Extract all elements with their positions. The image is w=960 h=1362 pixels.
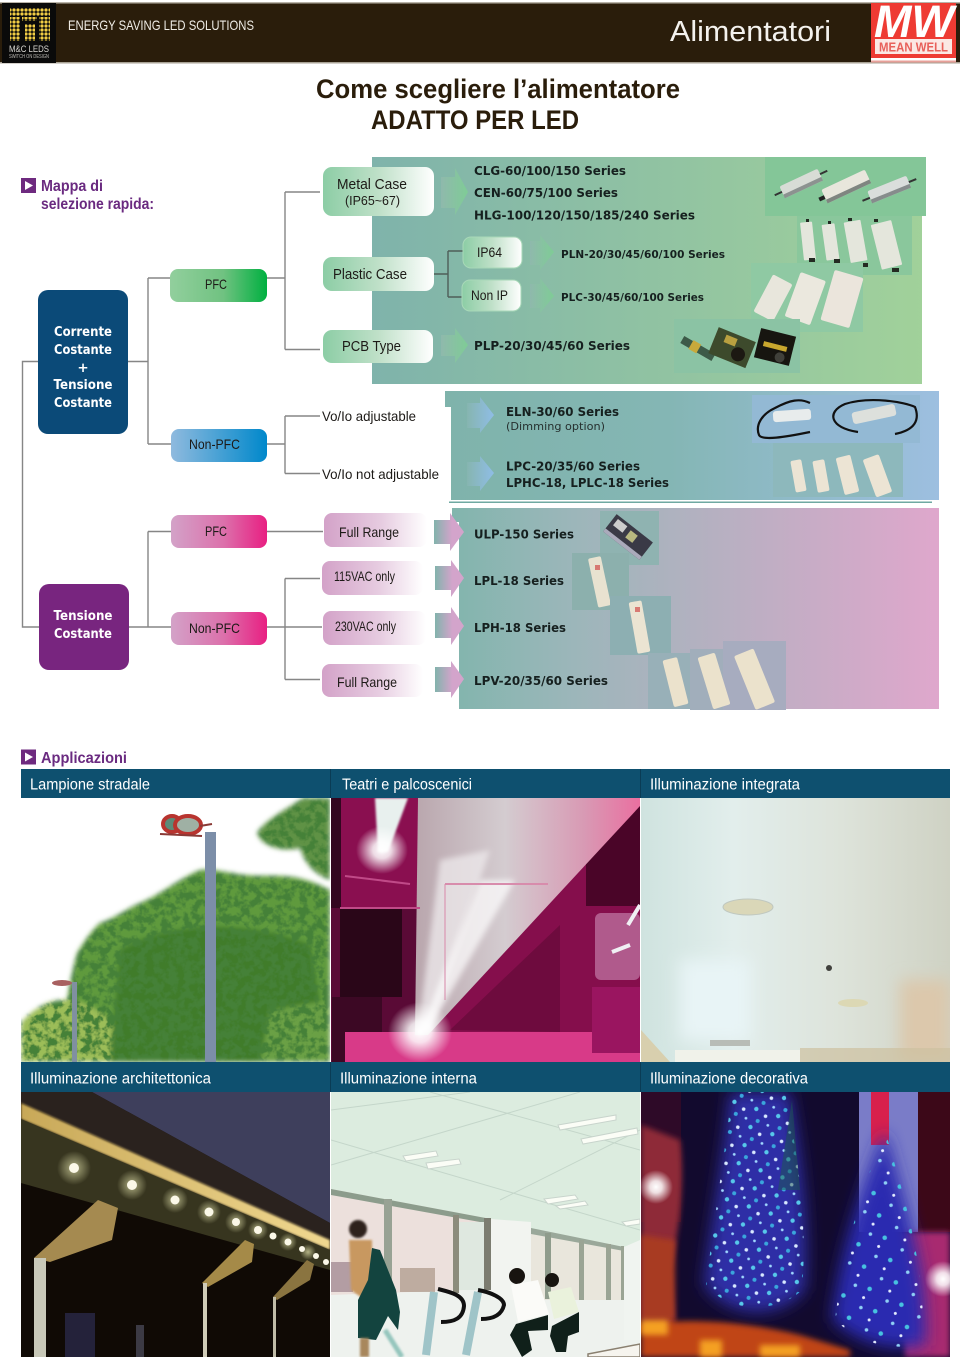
ceiling lights: [403, 1115, 640, 1226]
box: Corrente Costante + Tensione Costante: Costante: [54, 395, 112, 411]
box: 115VAC only: [322, 561, 423, 595]
box: Corrente Costante + Tensione Costante: +: [77, 360, 89, 376]
button: PFC pink: [171, 515, 267, 548]
product photo: ULP: [600, 511, 659, 565]
box: Tensione Costante: Tensione: [54, 608, 112, 624]
series: LPL: LPL-18 Series: [474, 574, 564, 588]
series: ULP: ULP-150 Series: [474, 528, 574, 542]
treadmill: [426, 1289, 504, 1355]
arrow: Vo/Io adjustable: [467, 397, 494, 433]
tagline: ENERGY SAVING LED SOLUTIONS: [68, 17, 254, 33]
photo: decorative lights: [639, 1092, 960, 1357]
panel: green PFC results: [372, 157, 926, 384]
photo: street lamp: [21, 798, 330, 1062]
series: ELN: ELN-30/60 Series: [506, 405, 619, 419]
button: Non-PFC blue: [171, 429, 267, 462]
box: Full Range Non-PFC: Full Range: [337, 674, 397, 690]
floor edge: [588, 1344, 640, 1357]
orange base: [641, 1321, 850, 1357]
box: 230VAC only: [323, 611, 426, 645]
arrow: IP64: [530, 235, 554, 270]
photo: ceiling lights: [641, 798, 950, 1062]
arrow: 115VAC: [435, 560, 464, 597]
box: Tensione Costante: [39, 584, 129, 670]
title: ADATTO PER LED: [371, 105, 579, 135]
header row 2: application names: Illuminazione interna: [340, 1070, 477, 1088]
header row 2: application names: [21, 1062, 950, 1092]
header band: [0, 0, 960, 64]
panel: blue non-PFC results: [445, 391, 939, 500]
header row 1: application names: [21, 769, 950, 798]
heading: selection map: [21, 178, 154, 213]
series: metal case: HLG-100/120/150/185/240 Series: [474, 208, 695, 222]
arrow: 230VAC: [435, 607, 464, 645]
arrow: Non IP: [530, 278, 554, 313]
header row 2: application names: Illuminazione decorativa: [650, 1070, 808, 1088]
photo: gym interior: [331, 1092, 640, 1357]
heading: selection map: selezione rapida:: [41, 196, 154, 213]
box: Metal Case: (IP65~67): [345, 193, 400, 208]
header row 1: application names: Lampione stradale: [30, 776, 150, 794]
series: metal case: CEN-60/75/100 Series: [474, 186, 618, 200]
product photo: ELN dimming drivers: [752, 395, 920, 443]
product photo: LPL: [572, 553, 629, 610]
box: PCB Type: PCB Type: [342, 338, 401, 355]
product photo: non-IP plastic drivers: [751, 263, 864, 332]
product photo: LPC drivers: [773, 443, 903, 498]
light dots: [706, 1092, 804, 1307]
product photo: LPH: [610, 596, 671, 655]
cyclists: [509, 1268, 579, 1357]
header title: Alimentatori: [670, 16, 831, 48]
title: Come scegliere l’alimentatore: [316, 74, 680, 104]
arrow: Vo/Io not adjustable: [467, 456, 494, 491]
box: IP64: IP64: [477, 244, 502, 260]
series: PLP: PLP-20/30/45/60 Series: [474, 339, 630, 353]
box: Full Range PFC: [324, 513, 427, 547]
series: metal case: [474, 164, 695, 222]
box: Corrente Costante + Tensione Costante: [38, 290, 128, 434]
box: Plastic Case: [323, 257, 434, 291]
button: Non-PFC blue: Non-PFC: [189, 436, 240, 452]
header row 2: application names: Illuminazione architettonica: [30, 1070, 211, 1088]
series: LPC: LPC-20/35/60 Series: [506, 460, 640, 474]
product photo: metal case drivers: [765, 157, 926, 216]
box: Tensione Costante: Costante: [54, 626, 112, 642]
button: Non-PFC pink: Non-PFC: [189, 620, 240, 636]
box: IP64: [463, 237, 522, 268]
box: 230VAC only: 230VAC only: [335, 618, 396, 634]
right windows: [531, 1228, 624, 1300]
box: 115VAC only: 115VAC only: [334, 568, 395, 584]
heading: applications: Applicazioni: [41, 750, 127, 767]
product photo: PCB type drivers: [674, 319, 800, 373]
arrow: Full Range Non-PFC: [435, 661, 464, 698]
arrow: PCB: [441, 328, 468, 363]
photo: architecture: [21, 1092, 330, 1357]
button: Non-PFC pink: [171, 612, 267, 645]
heading: selection map: Mappa di: [41, 178, 103, 195]
product photo: IP64 plastic drivers: [797, 216, 912, 275]
series: PLN: PLN-20/30/45/60/100 Series: [561, 249, 725, 261]
series: PLC: PLC-30/45/60/100 Series: [561, 292, 704, 304]
wall lights: [57, 1151, 329, 1265]
box: Non IP: Non IP: [471, 287, 508, 303]
series: LPC: [506, 460, 669, 490]
box: Corrente Costante + Tensione Costante: Corrente: [54, 324, 112, 340]
button: PFC pink: PFC: [205, 523, 227, 539]
series: metal case: CLG-60/100/150 Series: [474, 164, 626, 178]
box: Full Range PFC: Full Range: [339, 524, 399, 540]
runner: [349, 1220, 402, 1357]
button: PFC green: [170, 269, 267, 302]
arrow: Full Range PFC: [434, 513, 464, 551]
box: Plastic Case: Plastic Case: [333, 266, 407, 283]
logo: Mean Well: MEAN WELL: [879, 40, 948, 54]
left windows: [331, 1189, 491, 1295]
connector lines: tree: [22, 192, 463, 680]
box: PCB Type: [323, 330, 433, 363]
photo: stage: [331, 798, 640, 1062]
button: PFC green: PFC: [205, 276, 227, 292]
panel: pink constant voltage results: [452, 508, 939, 710]
series: ELN: (Dimming option): [506, 421, 605, 433]
arrow: metal case: [441, 168, 468, 215]
box: Metal Case: [323, 167, 434, 216]
label: Vo/Io not adjustable: Vo/Io not adjustable: [322, 466, 439, 482]
logo: M&C LEDS: [2, 3, 56, 63]
box: Corrente Costante + Tensione Costante: Tensione: [54, 377, 112, 393]
columns: [34, 1200, 314, 1357]
series: LPC: LPHC-18, LPLC-18 Series: [506, 476, 669, 490]
logo: M&C LEDS: M&C LEDS: [9, 44, 49, 55]
logo: Mean Well: [871, 0, 958, 62]
product photo: LPV: [648, 641, 786, 710]
lamp pole: [52, 816, 216, 1062]
header row 1: application names: Teatri e palcoscenici: [342, 776, 472, 794]
series: ELN: [506, 405, 619, 433]
tree glow: [704, 1092, 806, 1312]
box: Corrente Costante + Tensione Costante: Costante: [54, 342, 112, 358]
box: Non IP: [462, 280, 521, 311]
logo: M&C LEDS: SWITCH ON DESIGN: [9, 54, 49, 60]
series: LPV: LPV-20/35/60 Series: [474, 674, 608, 688]
series: LPH: LPH-18 Series: [474, 621, 566, 635]
box: Metal Case: Metal Case: [337, 176, 407, 193]
label: Vo/Io adjustable: Vo/Io adjustable: [322, 408, 416, 424]
box: Full Range Non-PFC: [322, 664, 423, 697]
title: [316, 74, 680, 135]
header row 1: application names: Illuminazione integrata: [650, 776, 800, 794]
